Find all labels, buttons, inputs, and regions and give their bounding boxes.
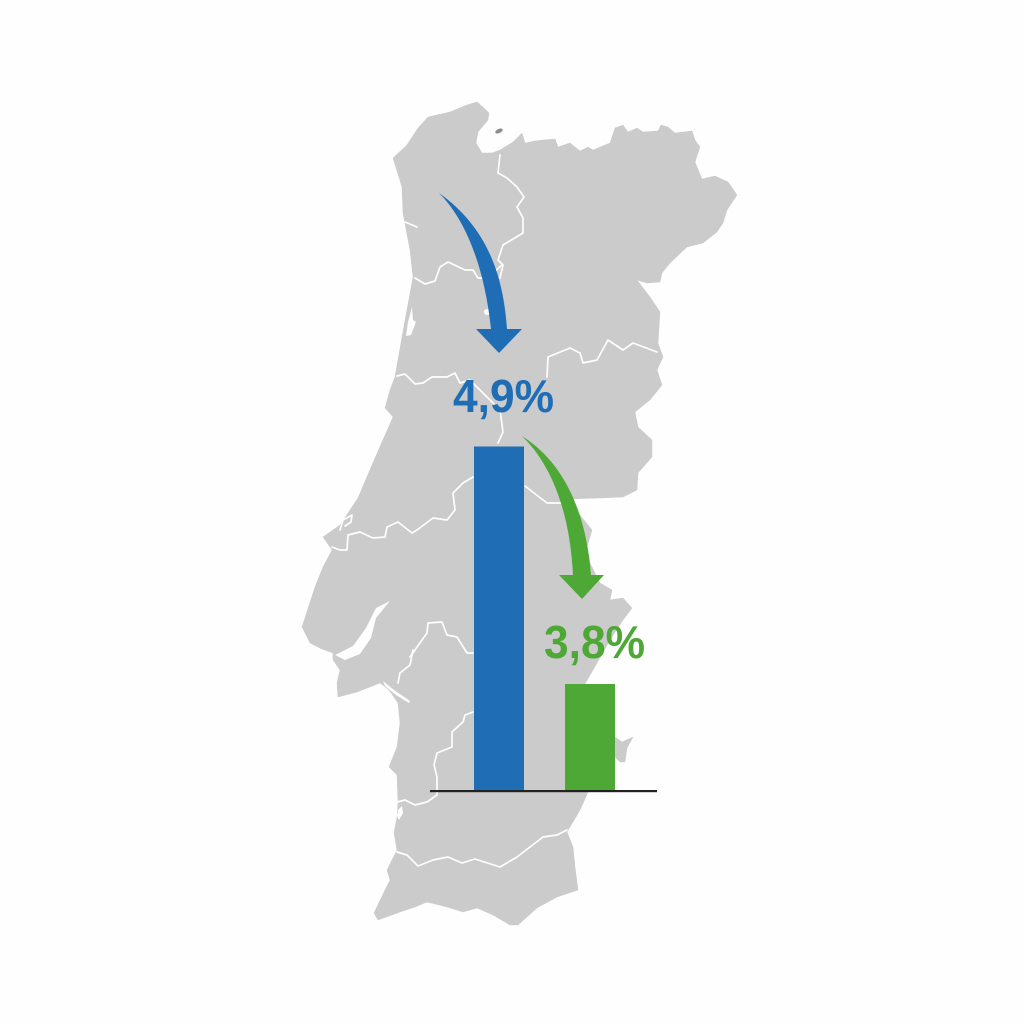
value label: 4,9%: 4,9% [453, 370, 554, 422]
green curved arrow [522, 436, 604, 599]
map of Portugal [302, 102, 737, 925]
map silhouette [302, 102, 737, 925]
chart baseline [430, 790, 657, 792]
regional borders [332, 155, 657, 867]
estuaries and lagoons [335, 307, 490, 820]
value label: 3,8%: 3,8% [544, 616, 645, 668]
blue curved arrow [439, 193, 522, 353]
blue bar [474, 446, 524, 790]
green bar [565, 684, 615, 790]
small lake [495, 127, 503, 135]
